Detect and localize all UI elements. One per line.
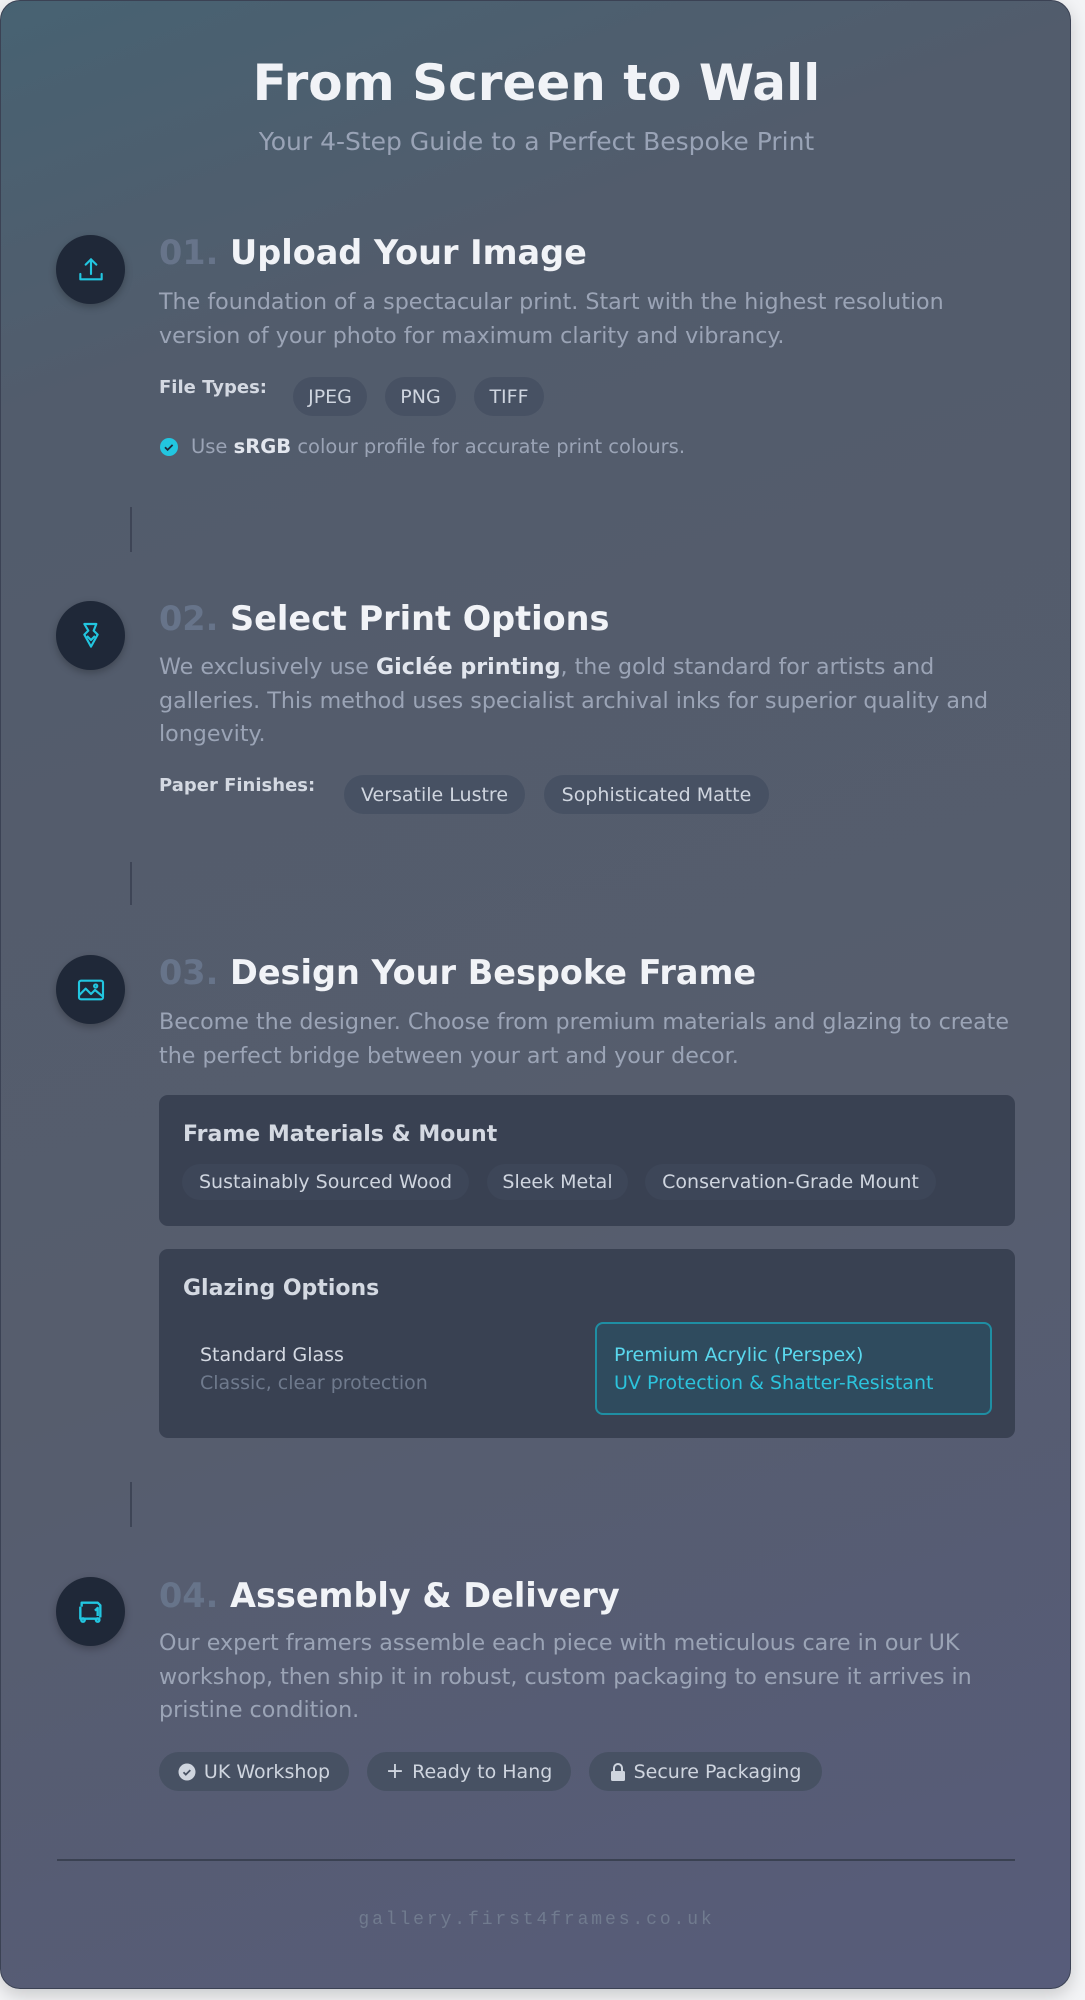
text step 2 bbox=[159, 654, 988, 747]
text step 4: pristine condition. bbox=[159, 1697, 359, 1723]
sRGB tip: Use sRGB colour profile for accurate print colours. bbox=[191, 435, 685, 458]
subtitle: Your 4-Step Guide to a Perfect Bespoke Print bbox=[259, 127, 814, 156]
text step 1 bbox=[158, 289, 944, 348]
heading step 3: 03. Design Your Bespoke Frame bbox=[159, 953, 756, 992]
panel: glazing options: Glazing Options bbox=[183, 1276, 379, 1301]
icon: delivery bbox=[56, 1577, 125, 1646]
feature chips: UK Workshop bbox=[204, 1760, 330, 1782]
paper finishes row: Sophisticated Matte bbox=[562, 784, 751, 806]
premium acrylic option bbox=[595, 1322, 992, 1415]
standard glass: Classic, clear protection bbox=[200, 1372, 428, 1394]
text step 1: The foundation of a spectacular print. Start with the highest resolution bbox=[159, 289, 944, 315]
heading step 4: 04. Assembly & Delivery bbox=[159, 1576, 620, 1615]
panel: frame materials: Conservation-Grade Mount bbox=[662, 1171, 919, 1193]
heading step 1: 01. Upload Your Image bbox=[159, 233, 587, 272]
text step 3 bbox=[159, 1009, 1009, 1068]
icon: image frame bbox=[56, 955, 125, 1024]
text step 2: We exclusively use Giclée printing, the gold standard for artists and bbox=[159, 654, 934, 680]
text step 2: galleries. This method uses specialist archival inks for superior quality and bbox=[159, 688, 988, 714]
panel: frame materials bbox=[159, 1095, 1015, 1226]
text step 1: version of your photo for maximum clarity and vibrancy. bbox=[159, 322, 784, 348]
panel: frame materials: Sleek Metal bbox=[502, 1171, 613, 1193]
panel: frame materials: Sustainably Sourced Wood bbox=[199, 1171, 452, 1193]
feature chips bbox=[159, 1752, 822, 1791]
panel: frame materials: Frame Materials & Mount bbox=[183, 1122, 497, 1147]
file types row: PNG bbox=[400, 386, 441, 408]
feature chips: Ready to Hang bbox=[412, 1760, 552, 1782]
text step 2: longevity. bbox=[159, 721, 266, 747]
title: From Screen to Wall bbox=[253, 54, 820, 112]
file types row: File Types: bbox=[159, 377, 267, 398]
paper finishes row: Versatile Lustre bbox=[361, 784, 508, 806]
paper finishes row: Paper Finishes: bbox=[159, 775, 315, 796]
footer url: gallery.first4frames.co.uk bbox=[358, 1910, 715, 1930]
icon: print brush bbox=[56, 601, 125, 670]
text step 4: workshop, then ship it in robust, custom packaging to ensure it arrives in bbox=[159, 1664, 972, 1690]
paper finishes row bbox=[159, 775, 769, 814]
premium acrylic option: Premium Acrylic (Perspex) bbox=[614, 1344, 863, 1366]
feature chips: Secure Packaging bbox=[634, 1760, 801, 1782]
file types row: JPEG bbox=[308, 386, 352, 408]
icon: upload bbox=[56, 235, 125, 304]
feature chips: + bbox=[386, 1759, 404, 1784]
panel: glazing options bbox=[159, 1249, 1015, 1438]
standard glass bbox=[200, 1344, 428, 1394]
text step 3: the perfect bridge between your art and your decor. bbox=[159, 1042, 739, 1068]
file types row: TIFF bbox=[489, 386, 529, 408]
text step 4: Our expert framers assemble each piece with meticulous care in our UK bbox=[159, 1630, 959, 1656]
standard glass: Standard Glass bbox=[200, 1344, 344, 1366]
premium acrylic option: UV Protection & Shatter-Resistant bbox=[614, 1372, 933, 1394]
text step 4 bbox=[159, 1630, 972, 1723]
heading step 2: 02. Select Print Options bbox=[159, 599, 609, 638]
text step 3: Become the designer. Choose from premium materials and glazing to create bbox=[159, 1009, 1009, 1035]
file types row bbox=[159, 377, 544, 416]
